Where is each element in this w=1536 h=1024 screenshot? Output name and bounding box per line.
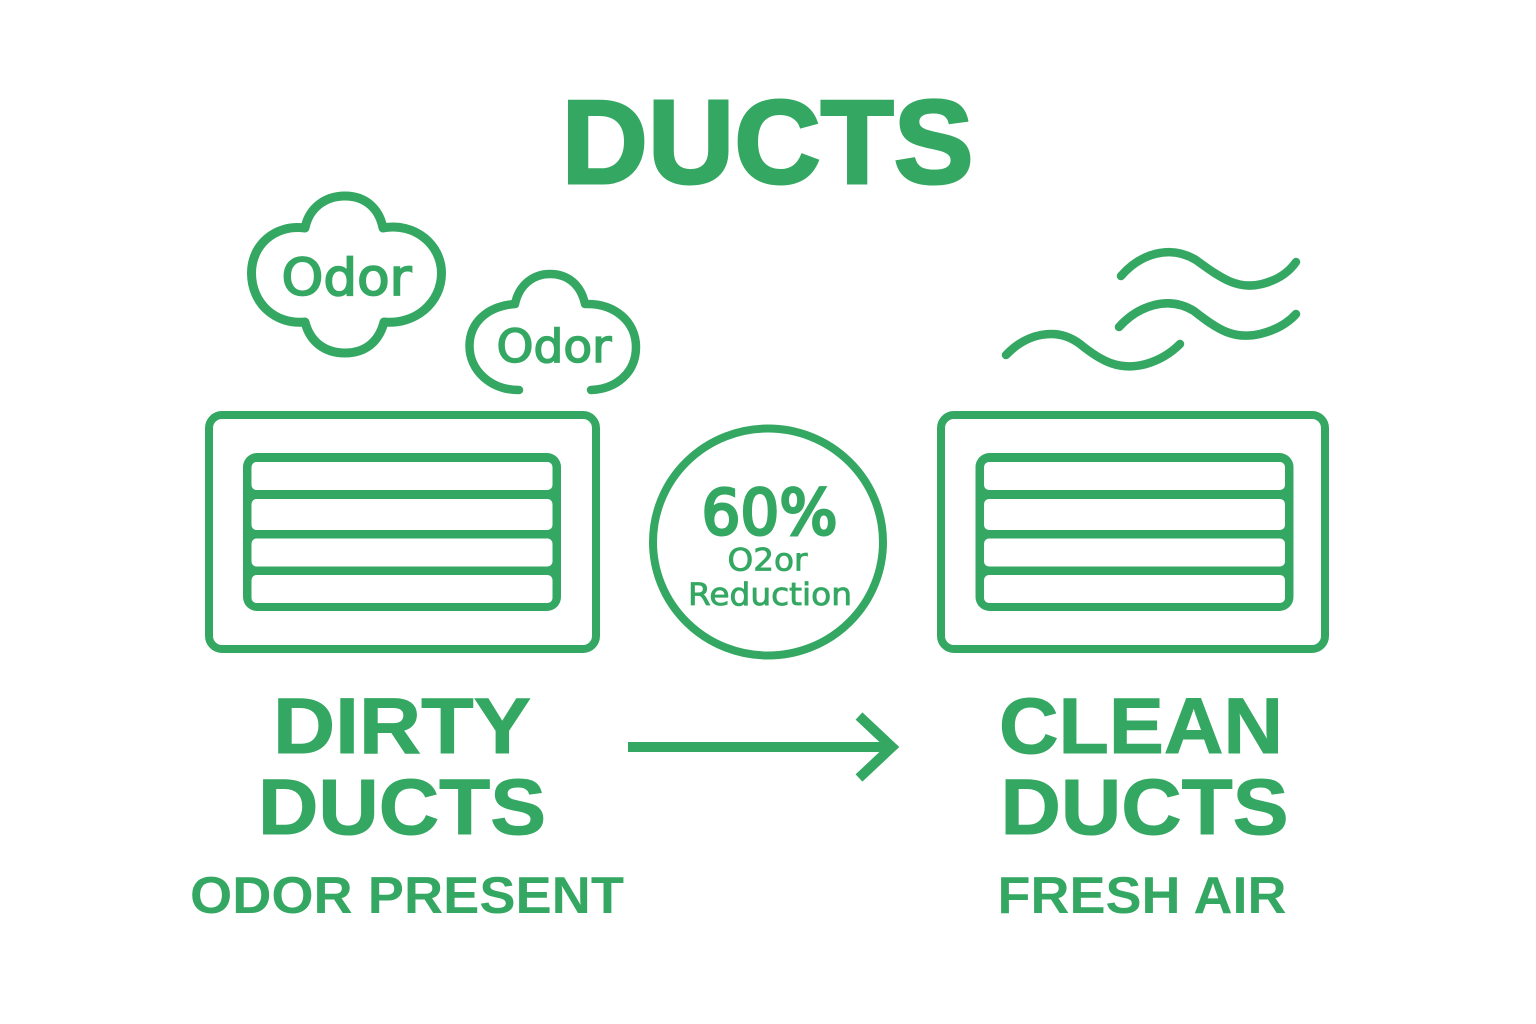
arrow: dirty to clean [628, 716, 892, 778]
icon: large odor cloud [252, 196, 442, 353]
icon: large odor cloud: Odor [282, 249, 412, 308]
heading: dirty ducts [258, 681, 546, 851]
icon: dirty duct vent [209, 415, 596, 649]
callout: 60% odor reduction: O2or [728, 542, 808, 578]
icon: clean duct vent [941, 415, 1325, 649]
heading: dirty ducts: DUCTS [258, 762, 546, 851]
heading: clean ducts: DUCTS [1000, 762, 1288, 851]
heading: clean ducts: CLEAN [999, 681, 1283, 770]
label: odor present: ODOR PRESENT [190, 867, 624, 925]
callout: 60% odor reduction: 60% [702, 476, 838, 549]
heading: dirty ducts: DIRTY [273, 681, 531, 770]
callout: 60% odor reduction [653, 428, 883, 656]
heading: clean ducts [999, 681, 1288, 851]
icon: small odor cloud [470, 274, 636, 390]
icon: small odor cloud: Odor [496, 320, 612, 373]
title: DUCTS [562, 76, 974, 209]
icon: fresh air waves [1006, 252, 1296, 366]
label: fresh air: FRESH AIR [998, 867, 1286, 925]
callout: 60% odor reduction: Reduction [688, 577, 852, 613]
